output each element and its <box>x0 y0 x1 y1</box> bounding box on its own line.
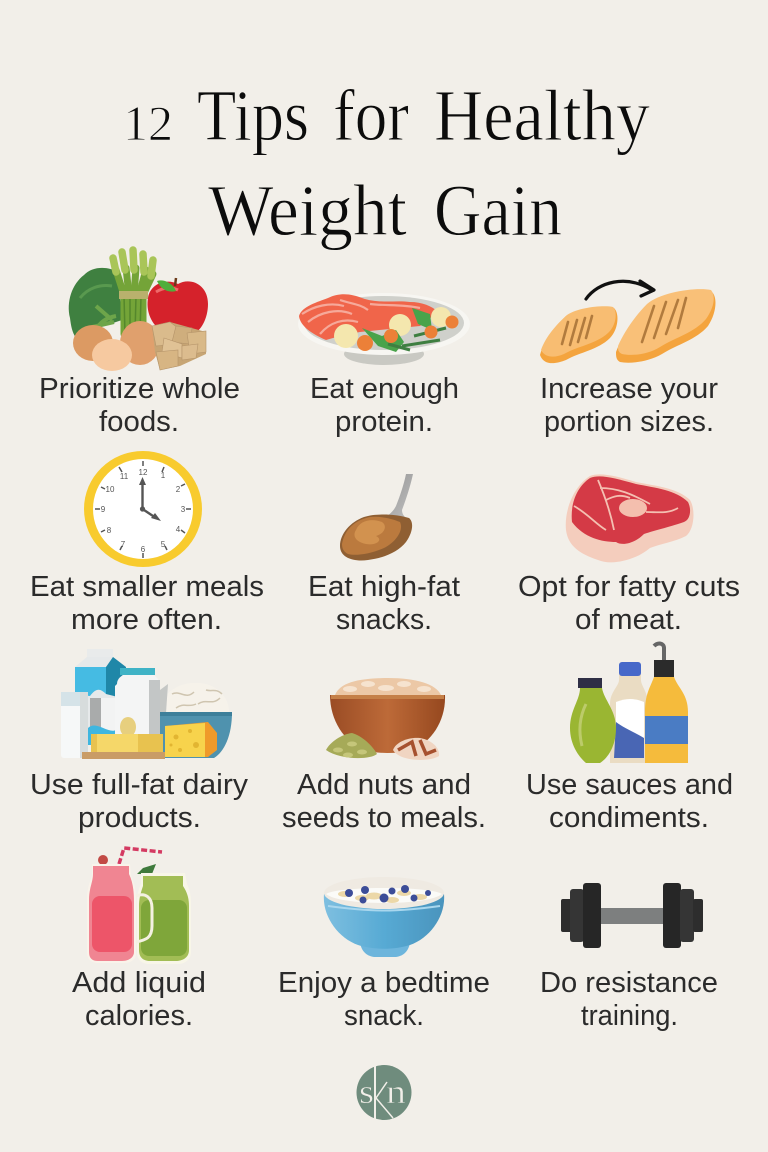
caption <box>30 769 249 834</box>
caption: Use full-fat dairy <box>30 769 249 801</box>
caption: products. <box>78 802 201 834</box>
caption: condiments. <box>549 802 709 834</box>
caption <box>518 571 740 636</box>
caption: portion sizes. <box>544 406 714 438</box>
caption: Add liquid <box>72 967 206 999</box>
icon: clock: 9 <box>101 505 106 514</box>
title: Healthy <box>434 75 650 156</box>
caption <box>540 967 718 1032</box>
caption: calories. <box>85 1000 193 1032</box>
caption: more often. <box>71 604 222 636</box>
caption: protein. <box>335 406 433 438</box>
icon: condiment bottles <box>570 644 688 763</box>
icon: clock: 12 <box>139 468 148 477</box>
caption: training. <box>581 1000 678 1032</box>
panel: high-fat snacks <box>308 474 460 636</box>
logo: n <box>386 1074 406 1111</box>
title: for <box>333 75 409 156</box>
panel: smaller meals <box>30 451 264 636</box>
icon: steak <box>566 474 693 562</box>
icon: clock: 10 <box>106 485 115 494</box>
title: Tips <box>197 75 309 156</box>
icon: clock: 2 <box>176 485 181 494</box>
caption: Eat smaller meals <box>30 571 264 603</box>
icon: cereal bowl <box>324 877 444 957</box>
caption: snack. <box>344 1000 424 1032</box>
title: Gain <box>434 170 562 251</box>
caption <box>278 967 490 1032</box>
icon: arrow <box>586 281 654 299</box>
icon: salmon plate <box>298 293 470 365</box>
caption <box>308 571 460 636</box>
caption: Enjoy a bedtime <box>278 967 490 999</box>
panel: sauces and condiments <box>526 644 733 834</box>
panel: increase portion sizes <box>540 281 719 438</box>
icon: clock: 4 <box>176 525 181 534</box>
caption: Prioritize whole <box>39 373 240 405</box>
caption: Eat high-fat <box>308 571 460 603</box>
title: Weight <box>208 170 407 251</box>
caption: of meat. <box>575 604 682 636</box>
caption: snacks. <box>336 604 432 636</box>
panel: liquid calories <box>72 848 206 1032</box>
caption: Do resistance <box>540 967 718 999</box>
icon: clock: 8 <box>107 526 112 535</box>
panel: prioritize whole foods <box>39 250 240 438</box>
icon: clock: 3 <box>181 505 186 514</box>
caption: Use sauces and <box>526 769 733 801</box>
caption: seeds to meals. <box>282 802 486 834</box>
icon: clock: 1 <box>161 471 166 480</box>
title <box>123 75 650 251</box>
icon: clock: 6 <box>141 545 146 554</box>
logo: s <box>359 1074 374 1111</box>
caption <box>310 373 459 438</box>
panel: fatty cuts of meat <box>518 474 740 636</box>
icon: clock: 7 <box>121 540 126 549</box>
panel: full-fat dairy <box>30 649 249 834</box>
icon: dairy products <box>61 649 232 759</box>
icon: dumbbell <box>561 883 703 948</box>
panel: eat enough protein <box>298 293 470 438</box>
logo <box>356 1065 412 1120</box>
icon: smoothie jars <box>87 848 191 964</box>
icon: nut bowl <box>326 678 445 760</box>
icon: spoon with nut butter <box>340 474 413 560</box>
panel: resistance training <box>540 883 718 1032</box>
panel: bedtime snack <box>278 877 490 1032</box>
caption: foods. <box>99 406 179 438</box>
caption: Add nuts and <box>297 769 471 801</box>
caption <box>30 571 264 636</box>
icon: whole foods <box>69 250 208 371</box>
caption <box>526 769 733 834</box>
panel: nuts and seeds <box>282 678 486 834</box>
caption: Increase your <box>540 373 719 405</box>
icon: chicken portions <box>540 289 715 363</box>
icon: clock: 5 <box>161 540 166 549</box>
caption: Eat enough <box>310 373 459 405</box>
title: 12 <box>123 95 173 151</box>
icon: clock: 11 <box>120 472 129 481</box>
caption <box>72 967 206 1032</box>
caption <box>39 373 240 438</box>
caption <box>282 769 486 834</box>
caption <box>540 373 719 438</box>
icon: clock <box>84 451 202 567</box>
caption: Opt for fatty cuts <box>518 571 740 603</box>
